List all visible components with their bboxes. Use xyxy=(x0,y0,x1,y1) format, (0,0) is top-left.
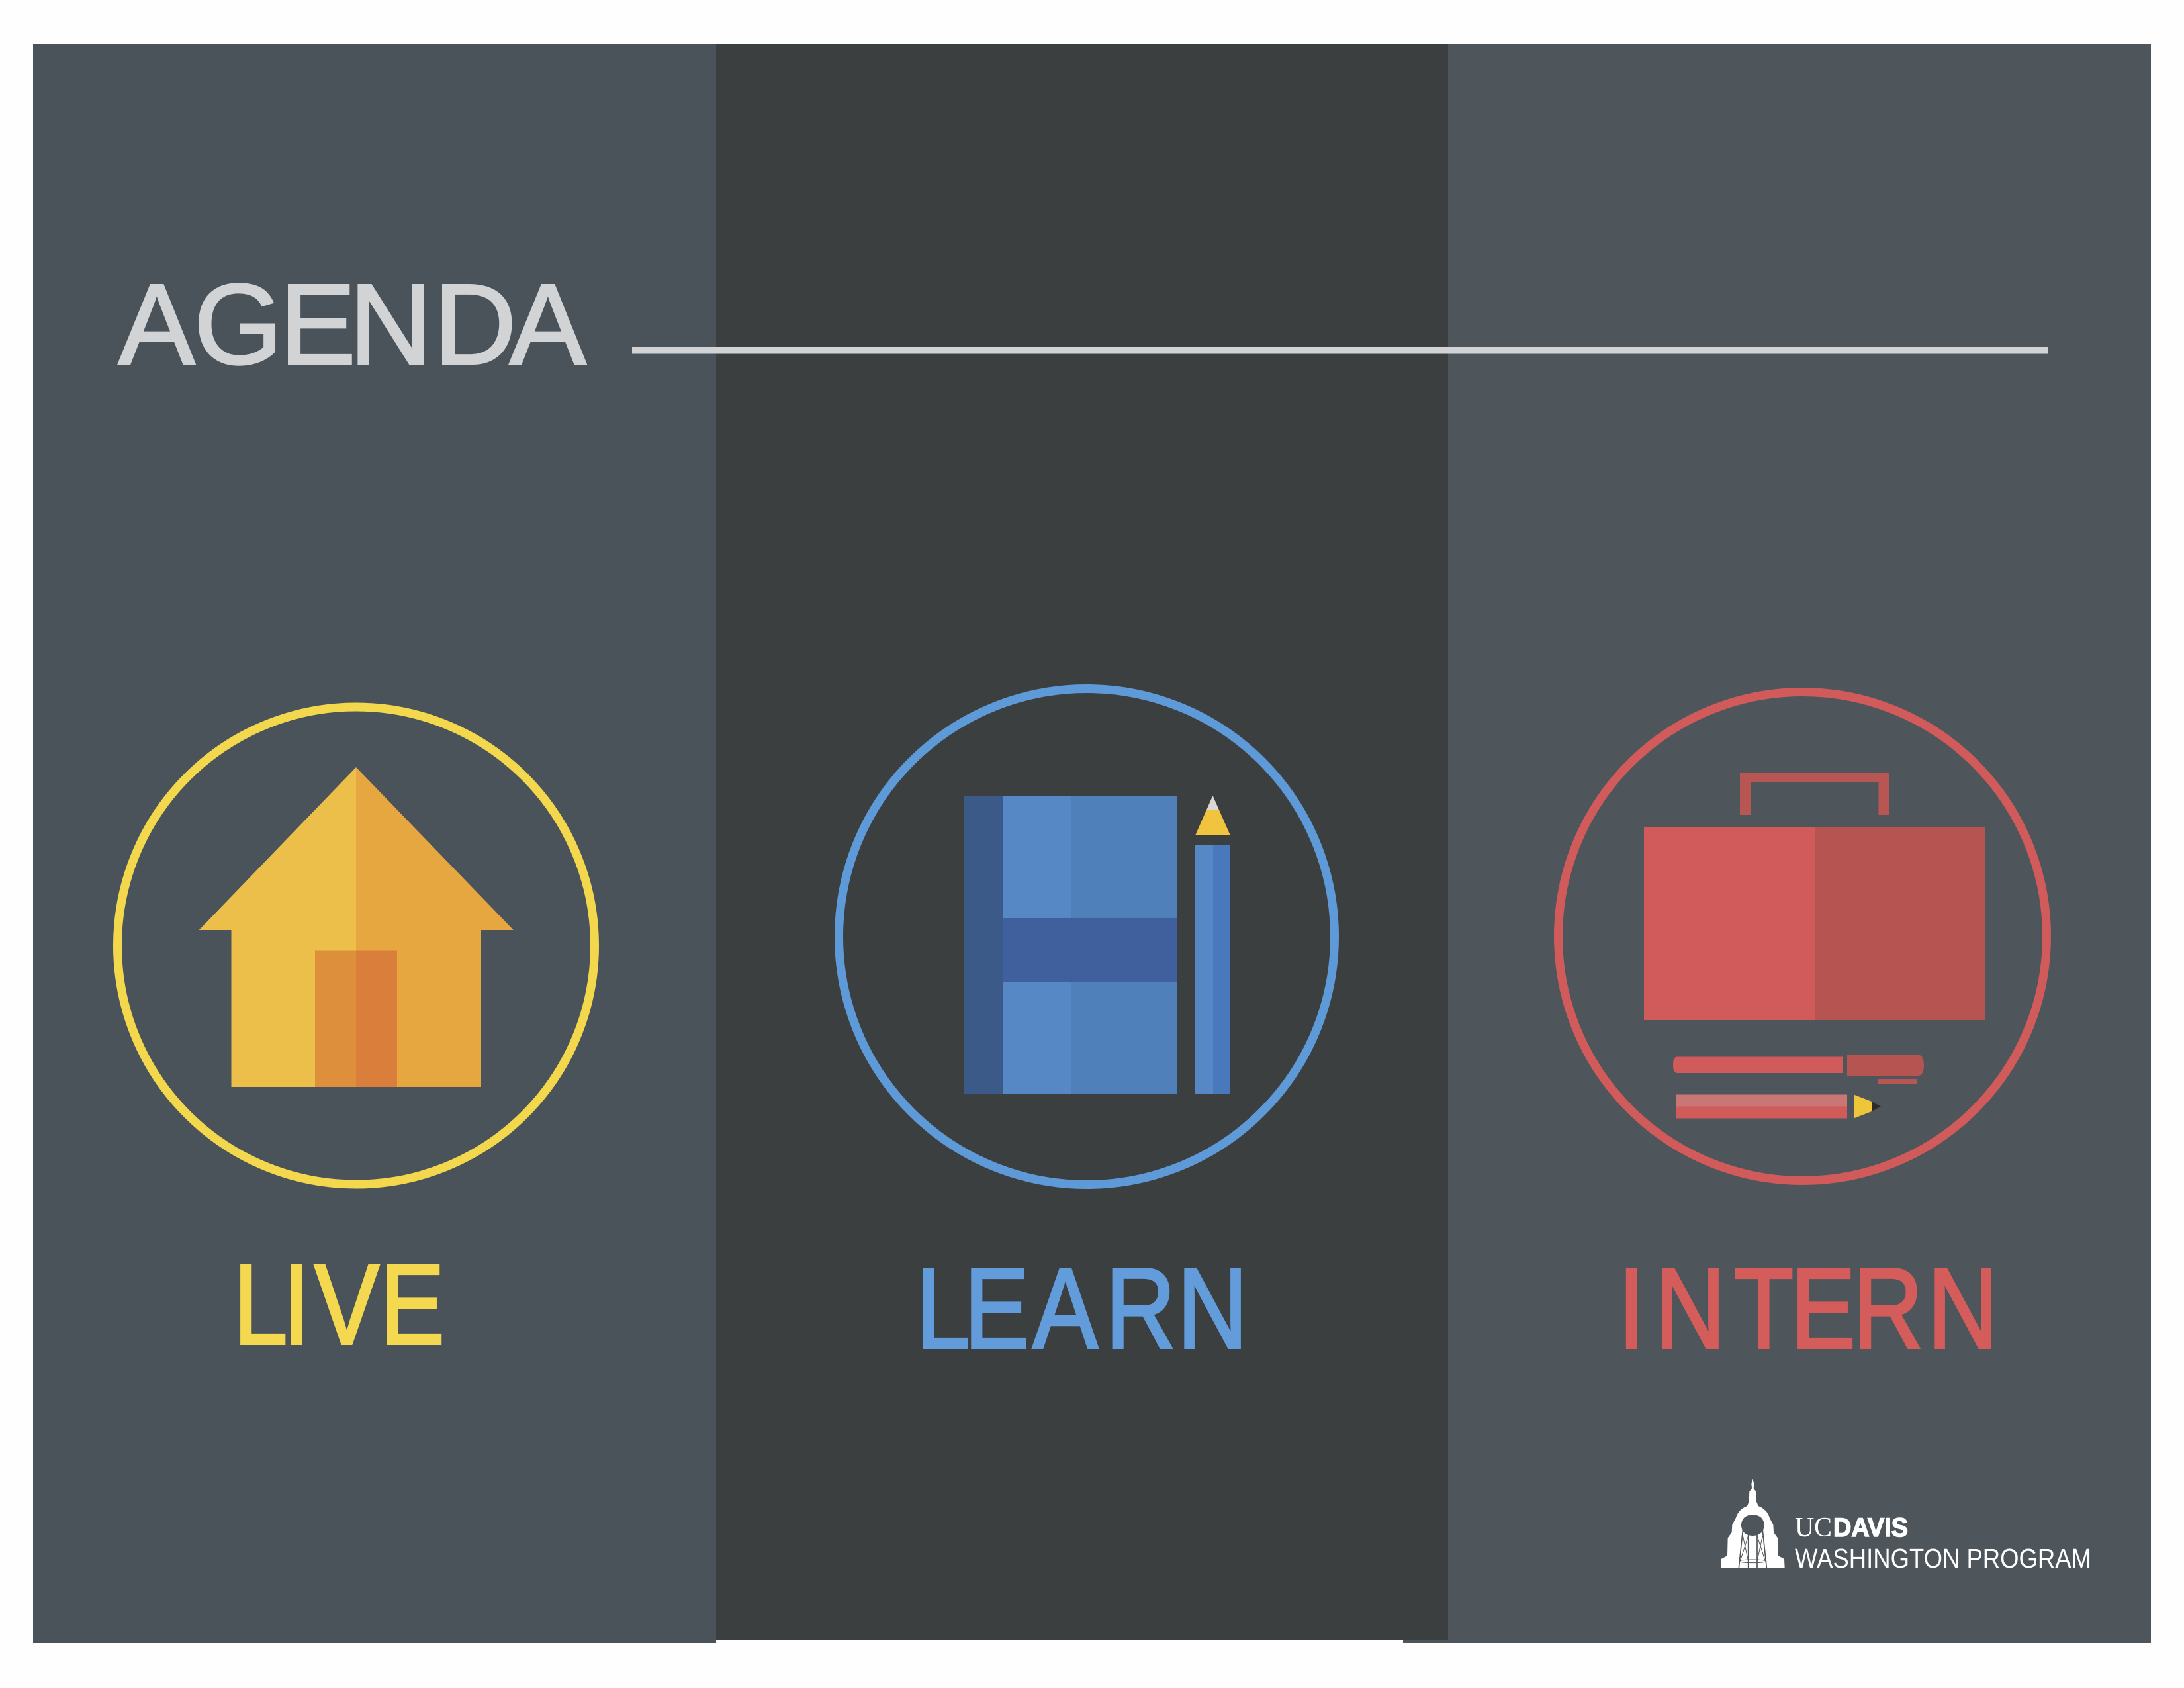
briefcase right half xyxy=(1815,827,1985,1020)
panel: intern xyxy=(1558,692,2046,1373)
panel: intern column background xyxy=(1403,44,2151,1643)
pencil lead xyxy=(1207,796,1219,810)
briefcase left half xyxy=(1644,827,1815,1020)
icon: capitol dome with water tower xyxy=(1721,1479,1785,1568)
label: learn: LEARN xyxy=(916,1245,1248,1373)
icon: notebook and pencil in blue circle xyxy=(839,688,1334,1185)
water tower legs xyxy=(1739,1530,1766,1568)
pencil tip xyxy=(1195,796,1230,835)
logo text: davis: DAVIS xyxy=(1833,1513,1908,1542)
logo: uc davis washington program xyxy=(1721,1479,2091,1573)
briefcase handle xyxy=(1740,773,1889,815)
logo text: uc: UC xyxy=(1795,1513,1832,1543)
notebook cover left xyxy=(1003,796,1071,1094)
label: intern: INTERN xyxy=(1618,1245,1998,1373)
pencil highlight xyxy=(1676,1095,1847,1107)
notebook cover right xyxy=(1071,796,1177,1094)
pencil body xyxy=(1676,1095,1847,1119)
panel: learn column background xyxy=(716,44,1448,1640)
notebook spine xyxy=(964,796,1003,1094)
house right half xyxy=(356,767,514,1087)
pencil lead xyxy=(1872,1102,1881,1111)
red circle ring xyxy=(1558,692,2046,1181)
pen cap xyxy=(1847,1055,1924,1076)
house left half xyxy=(199,767,356,1087)
pencil tip xyxy=(1854,1095,1872,1119)
pencil body left xyxy=(1195,845,1213,1094)
pen body xyxy=(1673,1056,1843,1073)
title rule xyxy=(632,347,2048,353)
dome silhouette xyxy=(1721,1479,1785,1568)
panel: live column background xyxy=(33,44,716,1643)
notebook band xyxy=(1003,918,1177,982)
blue circle ring xyxy=(839,688,1334,1185)
icon: house in yellow circle xyxy=(118,707,594,1184)
panel: live xyxy=(118,707,594,1369)
title: agenda: AGENDA xyxy=(118,259,586,388)
yellow circle ring xyxy=(118,707,594,1184)
logo text: washington program: WASHINGTON PROGRAM xyxy=(1795,1543,2091,1573)
label: live: LIVE xyxy=(234,1241,445,1369)
door left half xyxy=(315,951,356,1087)
icon: briefcase, pen and pencil in red circle xyxy=(1558,692,2046,1181)
panel: learn xyxy=(839,688,1334,1373)
pencil body right xyxy=(1213,845,1230,1094)
water tower tank xyxy=(1741,1515,1764,1536)
door right half xyxy=(356,951,397,1087)
pen clip xyxy=(1878,1079,1917,1084)
